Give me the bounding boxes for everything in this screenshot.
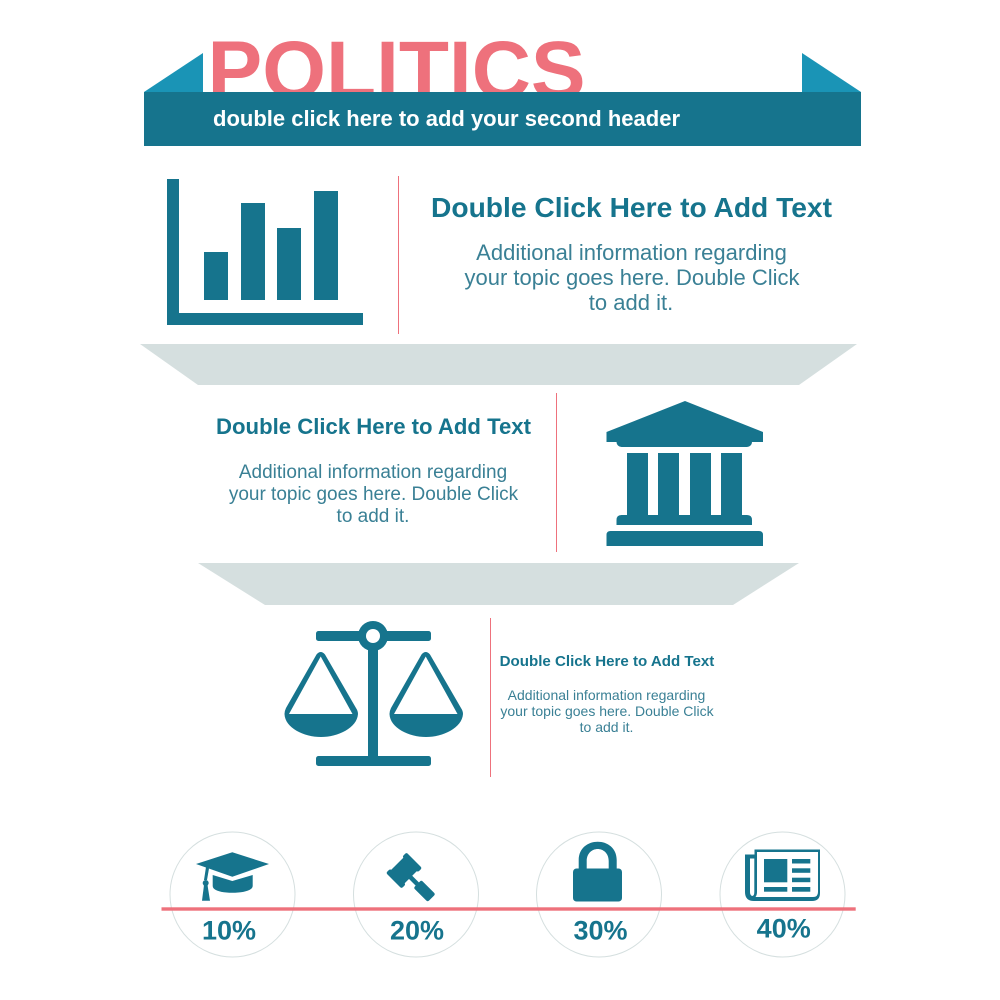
text block: section three: Double Click Here to Add Text xyxy=(500,653,714,670)
text block: section one: to add it. xyxy=(589,290,673,315)
text block: section two: Double Click Here to Add Text xyxy=(216,414,532,439)
stat: 40 percent xyxy=(720,832,845,957)
icon: scales of justice xyxy=(284,621,463,766)
text block: section one: your topic goes here. Double Click xyxy=(464,265,801,290)
text block: section two: to add it. xyxy=(337,506,409,527)
text block: section one: Double Click Here to Add Text xyxy=(431,191,833,223)
icon: gavel xyxy=(386,852,435,902)
stat: 30 percent: 30% xyxy=(573,916,628,946)
icon: newspaper xyxy=(745,850,820,901)
stat: 40 percent: 40% xyxy=(757,914,811,944)
divider: section two xyxy=(556,393,557,552)
fold band two xyxy=(198,563,799,605)
title: POLITICS xyxy=(208,25,586,116)
timeline line xyxy=(162,907,856,911)
text block: section one: Additional information regarding xyxy=(476,240,787,265)
text block: section three xyxy=(500,653,715,735)
text block: section two: your topic goes here. Double Click xyxy=(229,484,519,505)
icon: padlock xyxy=(573,842,622,902)
stat: 10 percent: 10% xyxy=(202,916,256,946)
divider: section one xyxy=(398,176,399,334)
stat: 20 percent: 20% xyxy=(390,916,444,946)
text block: section three: to add it. xyxy=(580,719,633,735)
text block: section two xyxy=(216,414,532,527)
fold band one xyxy=(140,344,857,385)
icon: bar chart xyxy=(167,179,363,325)
stat: 20 percent xyxy=(354,832,478,957)
icon: government building xyxy=(606,401,763,546)
text block: section two: Additional information regarding xyxy=(239,462,507,483)
text block: section one xyxy=(431,191,833,315)
icon: graduation cap xyxy=(196,852,269,901)
header ribbon xyxy=(144,53,861,146)
second header: double click here to add your second header xyxy=(213,106,680,131)
text block: section three: Additional information regarding xyxy=(508,687,705,703)
text block: section three: your topic goes here. Double Click xyxy=(500,703,715,719)
stat: 30 percent xyxy=(536,832,662,957)
stat: 10 percent xyxy=(170,832,295,957)
divider: section three xyxy=(490,618,491,777)
